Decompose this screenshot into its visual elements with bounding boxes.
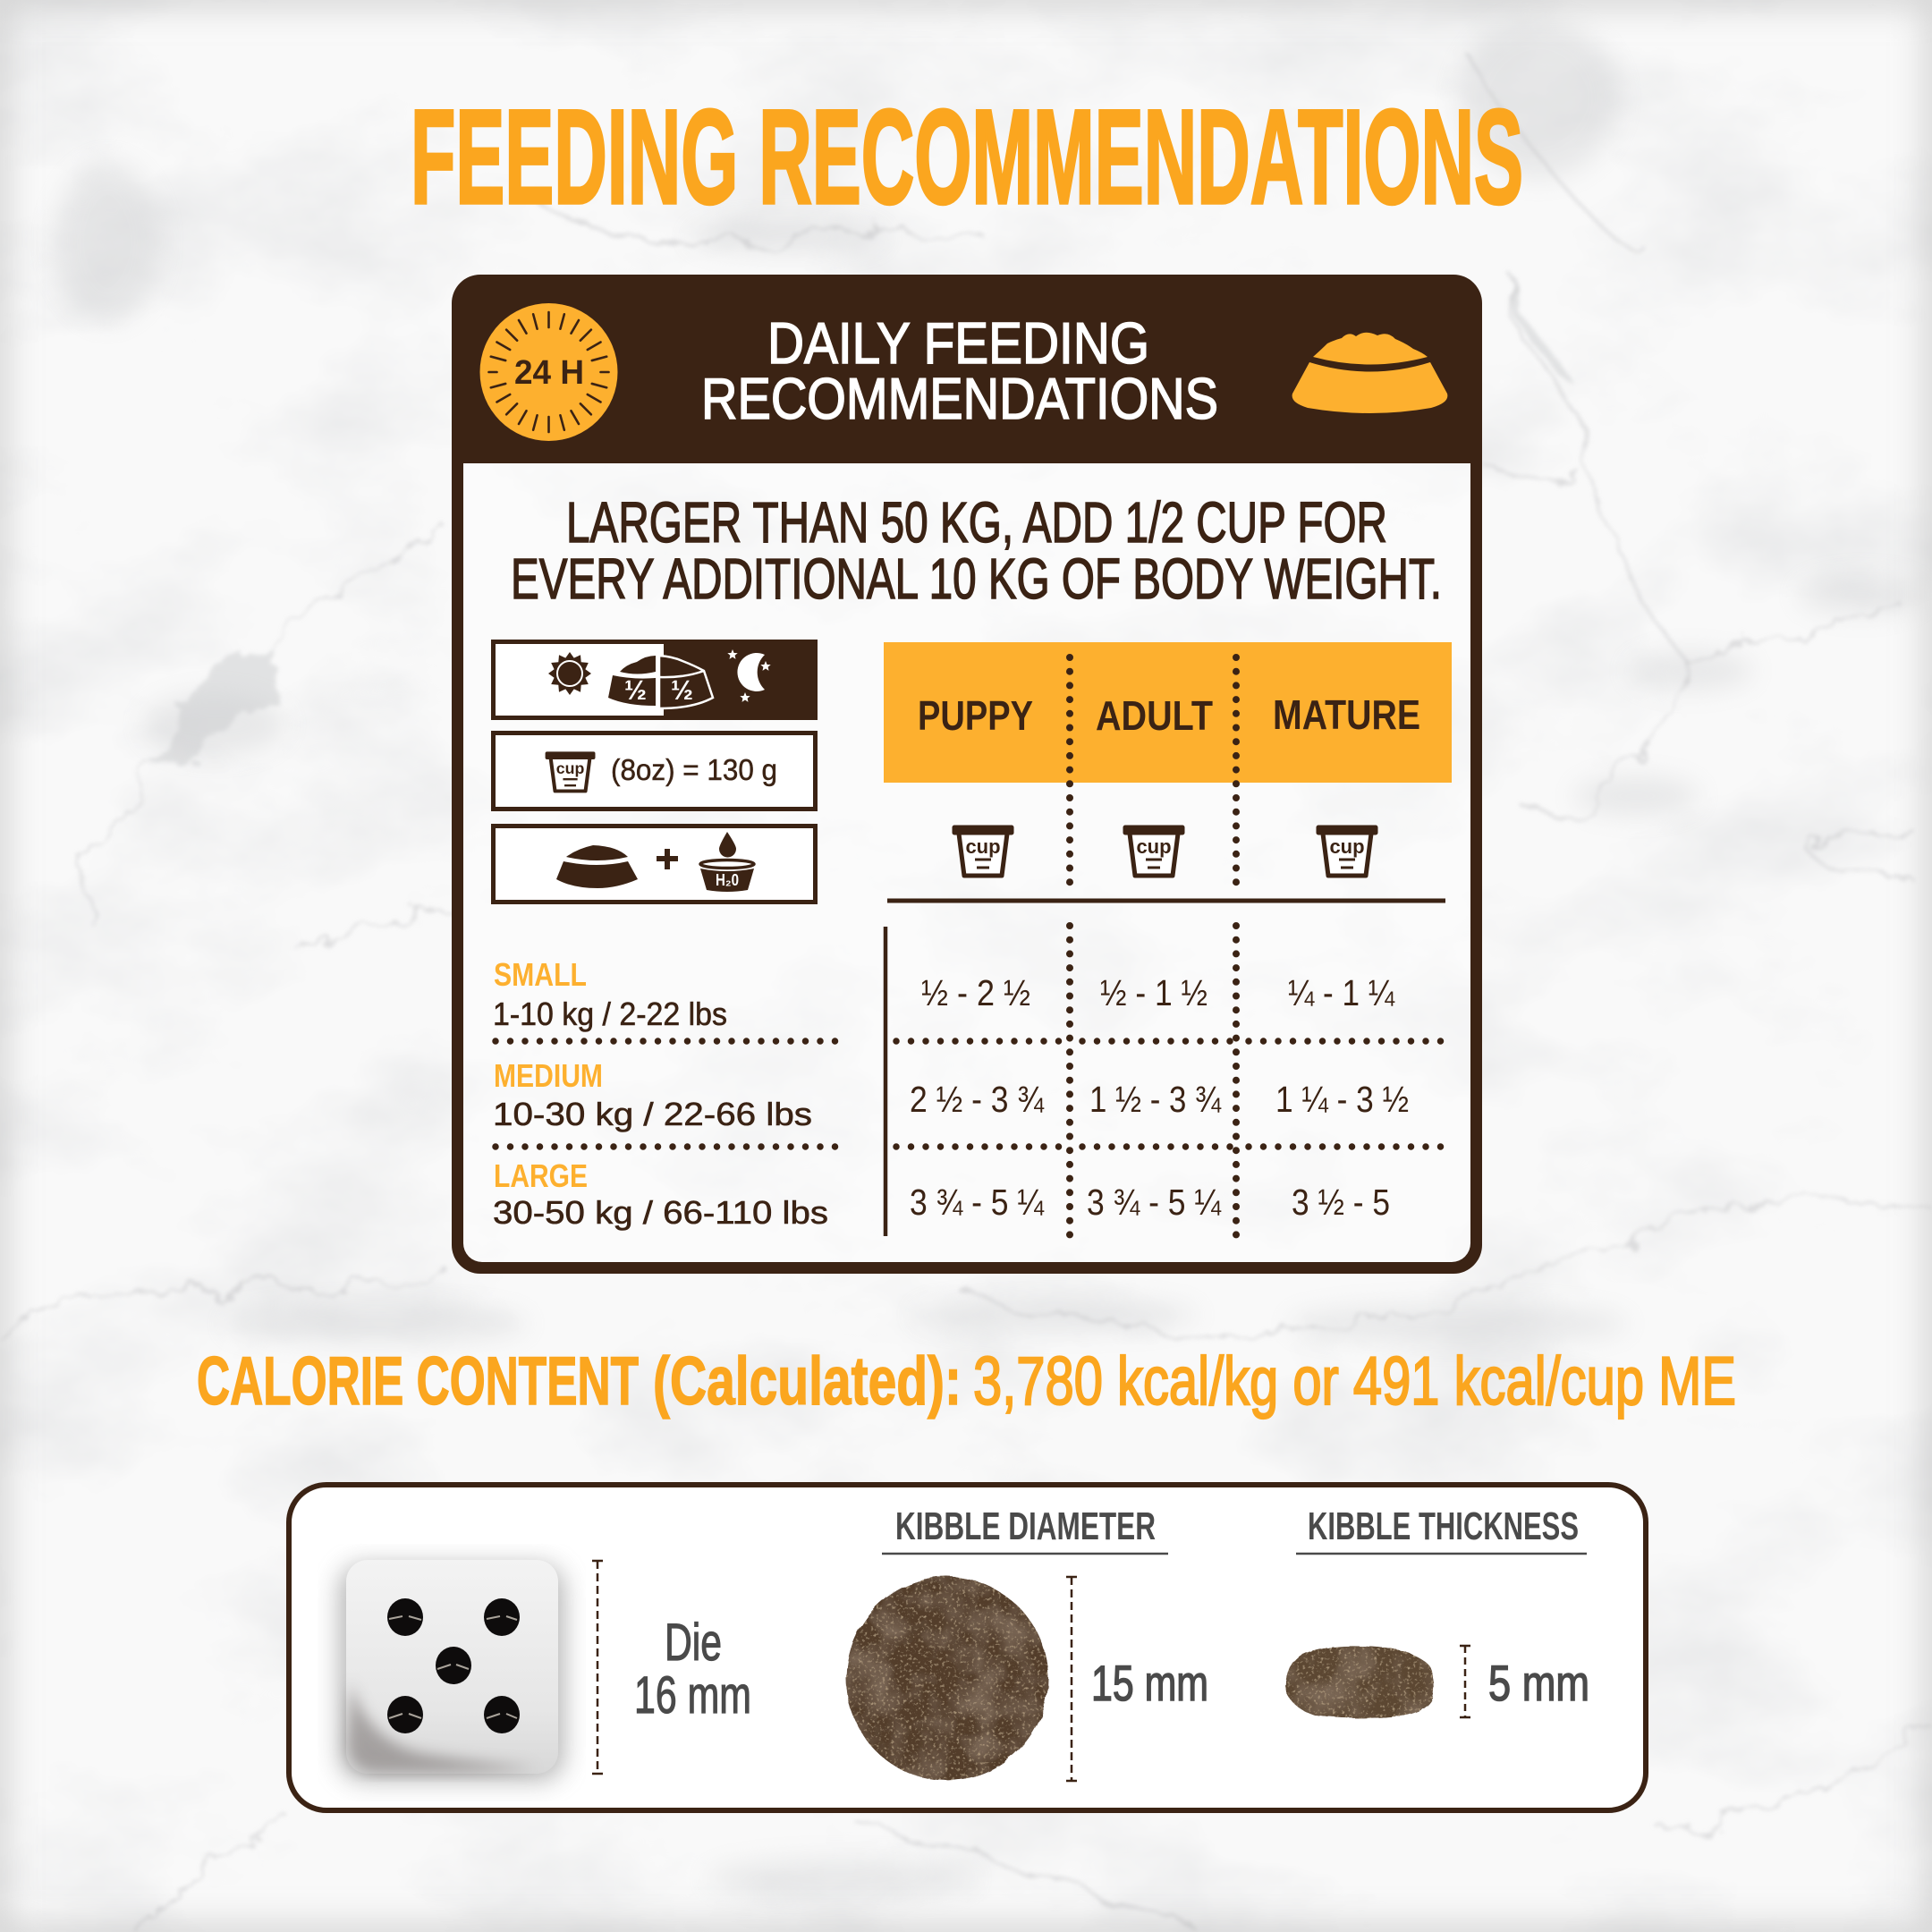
row label: large xyxy=(493,1157,828,1231)
die photo xyxy=(340,1560,564,1780)
column heading: mature: MATURE xyxy=(1273,691,1420,738)
icon: plus xyxy=(657,849,678,869)
card heading xyxy=(701,310,1218,431)
panel: cup measure box xyxy=(494,733,816,809)
icon: mature cup: cup xyxy=(1329,835,1365,858)
icon: mature cup xyxy=(1318,827,1376,876)
card heading: DAILY FEEDING xyxy=(767,310,1149,376)
diameter label: 15 mm xyxy=(1091,1655,1208,1711)
feeding amounts table: ½ - 1 ½ xyxy=(1100,972,1208,1013)
feeding amounts table: 1 ½ - 3 ¾ xyxy=(1089,1079,1222,1120)
row label: small: SMALL xyxy=(494,956,587,993)
feeding amounts table: 1 ¼ - 3 ½ xyxy=(1275,1079,1409,1120)
note: larger dogs xyxy=(511,490,1442,611)
row label: medium: MEDIUM xyxy=(494,1057,603,1094)
icon: water drop and bowl xyxy=(700,832,754,892)
icon: kibble bowl xyxy=(556,845,638,888)
icon: adult cup xyxy=(1125,827,1182,876)
calorie content line: (Calculated): xyxy=(653,1343,962,1419)
column heading: puppy: PUPPY xyxy=(918,692,1033,739)
icon: moon and stars xyxy=(727,649,771,702)
icon: puppy cup xyxy=(954,827,1012,876)
icon: sun xyxy=(548,652,591,695)
kibble photo: side view xyxy=(1285,1646,1435,1718)
row label: medium: 10-30 kg / 22-66 lbs xyxy=(493,1096,812,1132)
calorie content line: CALORIE CONTENT xyxy=(197,1343,639,1419)
icon: bowl split in halves: ½ xyxy=(624,674,647,706)
thickness label: 5 mm xyxy=(1488,1655,1589,1711)
row label: small: 1-10 kg / 2-22 lbs xyxy=(493,996,727,1032)
cup weight text: (8oz) = 130 g xyxy=(611,753,777,786)
icon: measuring cup xyxy=(547,753,593,791)
diameter dimension marker xyxy=(1066,1577,1077,1781)
calorie content line xyxy=(197,1343,1736,1419)
die dimension marker xyxy=(592,1561,603,1774)
card body xyxy=(452,275,1482,1274)
icon: puppy cup: cup xyxy=(965,835,1001,858)
thickness dimension marker xyxy=(1460,1646,1470,1717)
feeding amounts table: 3 ¾ - 5 ¼ xyxy=(910,1182,1045,1223)
feeding amounts table: ½ - 2 ½ xyxy=(921,972,1030,1013)
panel: kibble size comparison xyxy=(289,1485,1646,1810)
icon: 24 hour clock: 24 H xyxy=(514,354,584,392)
icon: food bowl xyxy=(1292,333,1447,413)
feeding amounts table xyxy=(910,972,1409,1223)
icon: 24 hour clock xyxy=(479,303,617,441)
feeding amounts table: 2 ½ - 3 ¾ xyxy=(910,1079,1045,1120)
panel: split meals box xyxy=(494,640,818,720)
card outline and header band xyxy=(452,275,1482,1274)
icon: water drop and bowl: H₂0 xyxy=(716,871,739,889)
die size label: 16 mm xyxy=(634,1666,751,1724)
kibble thickness heading: KIBBLE THICKNESS xyxy=(1308,1504,1579,1548)
column heading: adult: ADULT xyxy=(1096,692,1213,739)
feeding amounts table: 3 ¾ - 5 ¼ xyxy=(1087,1182,1222,1223)
feeding amounts table: ¼ - 1 ¼ xyxy=(1288,972,1395,1013)
icon: bowl split in halves xyxy=(608,656,713,708)
die size label xyxy=(634,1614,751,1724)
icon: measuring cup: cup xyxy=(556,759,584,777)
icon: bowl split in halves: ½ xyxy=(671,674,693,706)
note: larger dogs: EVERY ADDITIONAL 10 KG OF BODY WEIGHT. xyxy=(511,547,1442,611)
kibble diameter heading: KIBBLE DIAMETER xyxy=(895,1504,1156,1548)
feeding amounts table: 3 ½ - 5 xyxy=(1292,1182,1390,1223)
row label: medium xyxy=(493,1057,812,1132)
row label: large: 30-50 kg / 66-110 lbs xyxy=(493,1194,828,1231)
die size label: Die xyxy=(665,1614,722,1672)
life stage header band xyxy=(884,642,1452,783)
note: larger dogs: LARGER THAN 50 KG, ADD 1/2 CUP FOR xyxy=(566,490,1387,555)
icon: adult cup: cup xyxy=(1136,835,1172,858)
row label: large: LARGE xyxy=(494,1157,588,1194)
kibble photo: top view xyxy=(846,1577,1048,1781)
panel: food plus water box xyxy=(494,826,816,902)
card heading: RECOMMENDATIONS xyxy=(701,366,1218,431)
panel: daily feeding card xyxy=(452,275,1482,1274)
row label: small xyxy=(493,956,727,1032)
